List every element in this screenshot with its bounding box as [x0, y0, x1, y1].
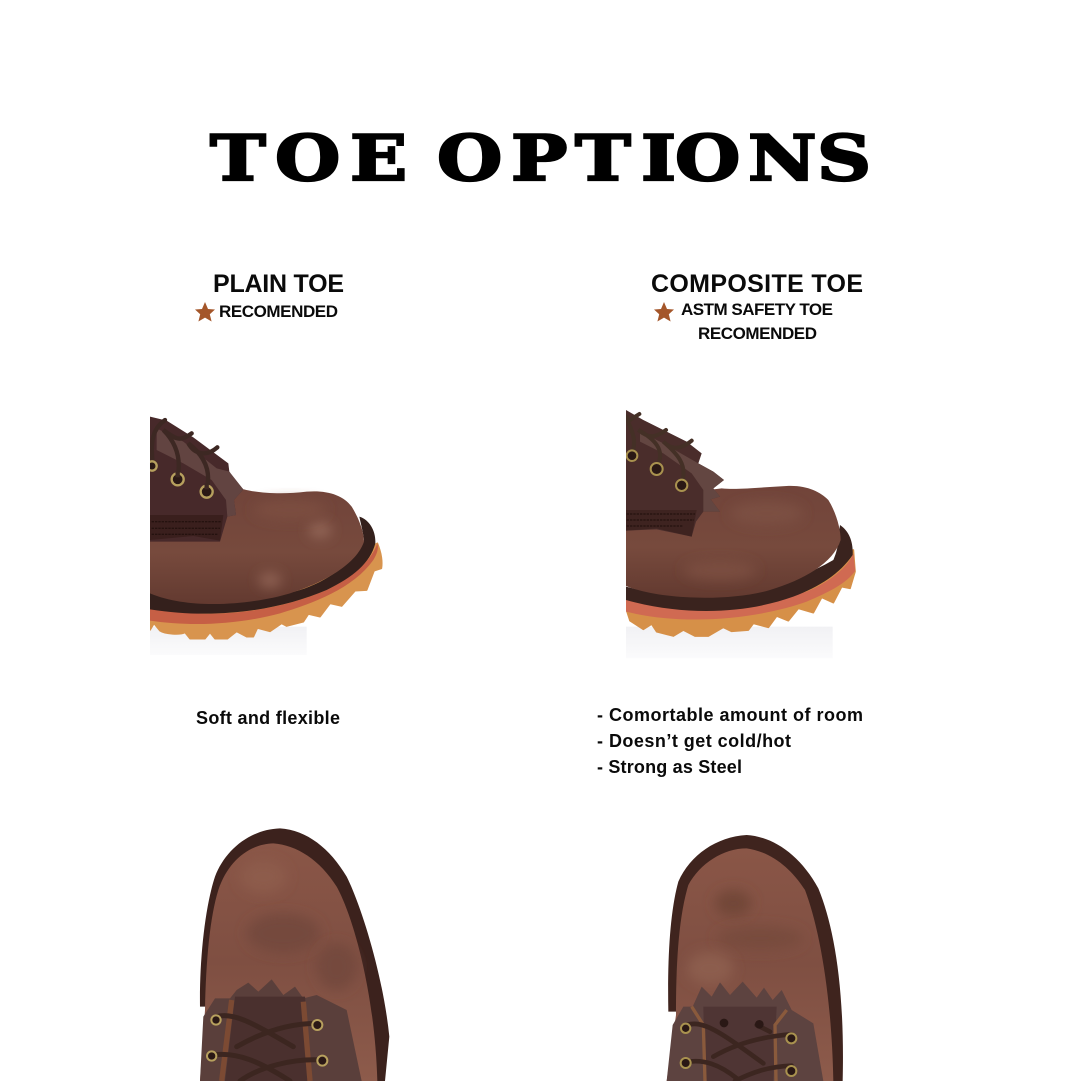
title: TOE OPTIONS: [210, 122, 871, 196]
side view boot photo: [626, 410, 855, 658]
top view boot photo: [667, 835, 843, 1081]
feature list: [597, 705, 863, 777]
top view boot photo: [200, 828, 389, 1081]
side view boot photo: [147, 417, 382, 655]
feature: strength: - Strong as Steel: [597, 757, 742, 777]
heading: plain toe: PLAIN TOE: [213, 270, 344, 298]
feature: room: - Comortable amount of room: [597, 705, 863, 725]
recommendation label: RECOMENDED: [219, 302, 338, 321]
feature: temperature: - Doesn’t get cold/hot: [597, 731, 791, 751]
heading: composite toe: COMPOSITE TOE: [651, 270, 863, 298]
icon: star: [195, 302, 215, 322]
description: Soft and flexible: [196, 708, 340, 728]
safety label: ASTM SAFETY TOE: [681, 300, 833, 319]
panel: plain toe: [147, 270, 389, 1081]
recommendation label: RECOMENDED: [698, 324, 817, 343]
icon: star: [654, 302, 674, 322]
panel: composite toe: [597, 270, 863, 1081]
